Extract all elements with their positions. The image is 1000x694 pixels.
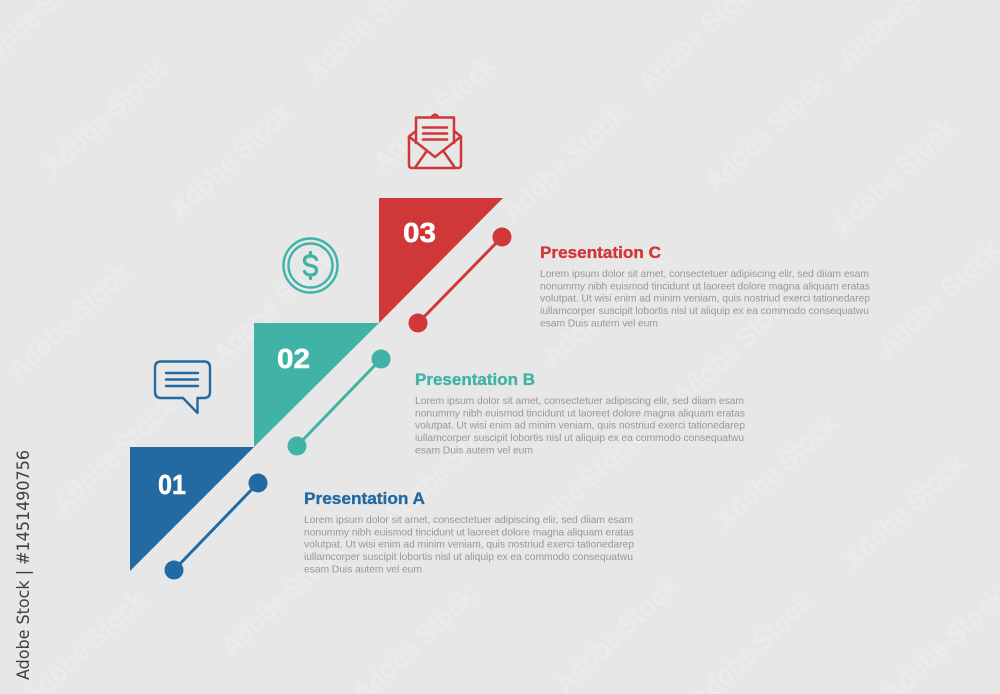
watermark pattern: Adobe Stock (709, 407, 843, 535)
number 01: 01 (158, 469, 186, 500)
watermark pattern: Adobe Stock (2, 257, 136, 385)
watermark pattern: Adobe Stock (377, 404, 511, 532)
watermark pattern: Adobe Stock (667, 284, 801, 412)
watermark pattern: Adobe Stock (37, 54, 171, 182)
watermark pattern: Adobe Stock (367, 49, 501, 177)
step 1: blue triangle (130, 447, 254, 571)
text block: Presentation A: Lorem ipsum dolor sit amet, consectetuer adipiscing elir, sed diiam esam (304, 515, 633, 526)
watermark pattern: Adobe Stock (164, 96, 298, 224)
watermark pattern: Adobe Stock (837, 447, 971, 575)
step 3: red triangle (379, 198, 503, 323)
text block: Presentation C: Lorem ipsum dolor sit amet, consectetuer adipiscing elir, sed diiam esam (540, 269, 869, 280)
watermark pattern: Adobe Stock (537, 244, 671, 372)
stock id side label: Adobe Stock | #1451490756 (14, 450, 34, 680)
text block: Presentation A (304, 490, 634, 576)
watermark pattern: Adobe Stock (512, 424, 646, 552)
text block: Presentation B: nonummy nibh euismod tincidunt ut laoreet dolore magna aliquam eratas (415, 408, 745, 420)
text block: Presentation B: Lorem ipsum dolor sit amet, consectetuer adipiscing elir, sed diiam esam (415, 396, 744, 407)
watermark pattern: Adobe Stock (47, 391, 181, 519)
text block: Presentation A: iullamcorper suscipit lobortis nisl ut aliquip ex ea commodo consequatwu (304, 552, 633, 563)
icon: chat bubble (155, 362, 210, 413)
text block: Presentation C: Presentation C (540, 244, 661, 262)
step 2: teal triangle (254, 323, 379, 447)
watermark pattern: Adobe Stock (207, 241, 341, 369)
text block: Presentation A: nonummy nibh euismod tincidunt ut laoreet dolore magna aliquam eratas (304, 528, 634, 538)
text block: Presentation B: Presentation B (415, 371, 535, 389)
text block: Presentation B (415, 371, 745, 456)
text block: Presentation B: iullamcorper suscipit lobortis nisl ut aliquip ex ea commodo consequatwu (415, 433, 744, 444)
watermark pattern: Adobe Stock (497, 99, 631, 227)
step 1 connector (164, 474, 268, 580)
text block: Presentation A: esam Duis autem vel eum (304, 564, 422, 576)
icon: dollar coin (284, 238, 338, 292)
number 02: 02 (277, 343, 310, 374)
text block: Presentation A: volutpat. Ut wisi enim ad minim veniam, quis nostriud exerci tationedarep (304, 540, 634, 550)
watermark pattern: Adobe Stock (215, 534, 349, 662)
text block: Presentation C (540, 244, 870, 330)
text block: Presentation C: iullamcorper suscipit lobortis nisl ut aliquip ex ea commodo consequatwu (540, 306, 869, 317)
watermark pattern: Adobe Stock (827, 112, 961, 240)
watermark pattern: Adobe Stock (699, 69, 833, 197)
text block: Presentation A: Presentation A (304, 490, 425, 508)
text block: Presentation C: nonummy nibh euismod tincidunt ut laoreet dolore magna aliquam eratas (540, 282, 870, 292)
number 03: 03 (403, 217, 436, 248)
text block: Presentation B: esam Duis autem vel eum (415, 446, 533, 456)
text block: Presentation C: esam Duis autem vel eum (540, 318, 658, 330)
text block: Presentation C: volutpat. Ut wisi enim ad minim veniam, quis nostriud exerci tationedarep (540, 294, 870, 304)
step 3 connector (408, 228, 512, 332)
step 2 connector (288, 350, 390, 456)
icon: open envelope (409, 114, 461, 168)
text block: Presentation B: volutpat. Ut wisi enim ad minim veniam, quis nostriud exerci tationedarep (415, 420, 745, 432)
